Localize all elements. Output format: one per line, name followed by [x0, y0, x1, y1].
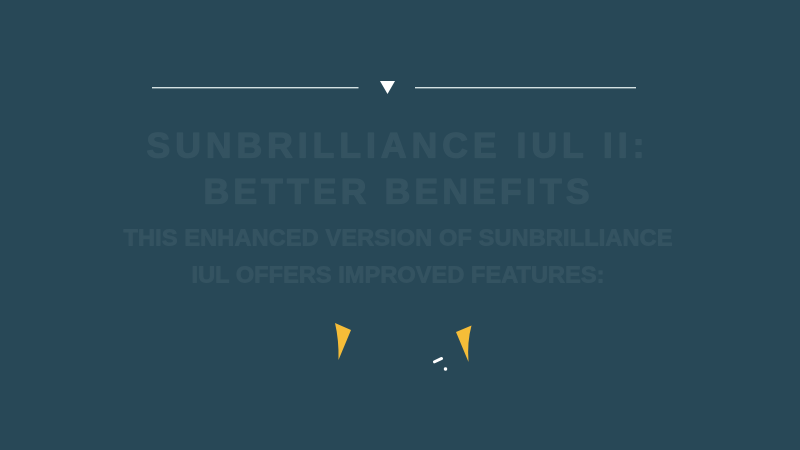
icon: left yellow shard [335, 323, 351, 360]
subtitle [124, 224, 672, 288]
icon: white down triangle [380, 81, 395, 94]
white dash and dot fragments [434, 358, 447, 371]
header divider with triangle [152, 81, 636, 94]
icon: right yellow shard [456, 326, 472, 362]
title: SUNBRILLIANCE IUL II: [146, 126, 644, 166]
title: BETTER BENEFITS [204, 172, 590, 212]
subtitle: THIS ENHANCED VERSION OF SUNBRILLIANCE [124, 224, 672, 250]
subtitle: IUL OFFERS IMPROVED FEATURES: [192, 262, 604, 288]
title [146, 126, 644, 212]
